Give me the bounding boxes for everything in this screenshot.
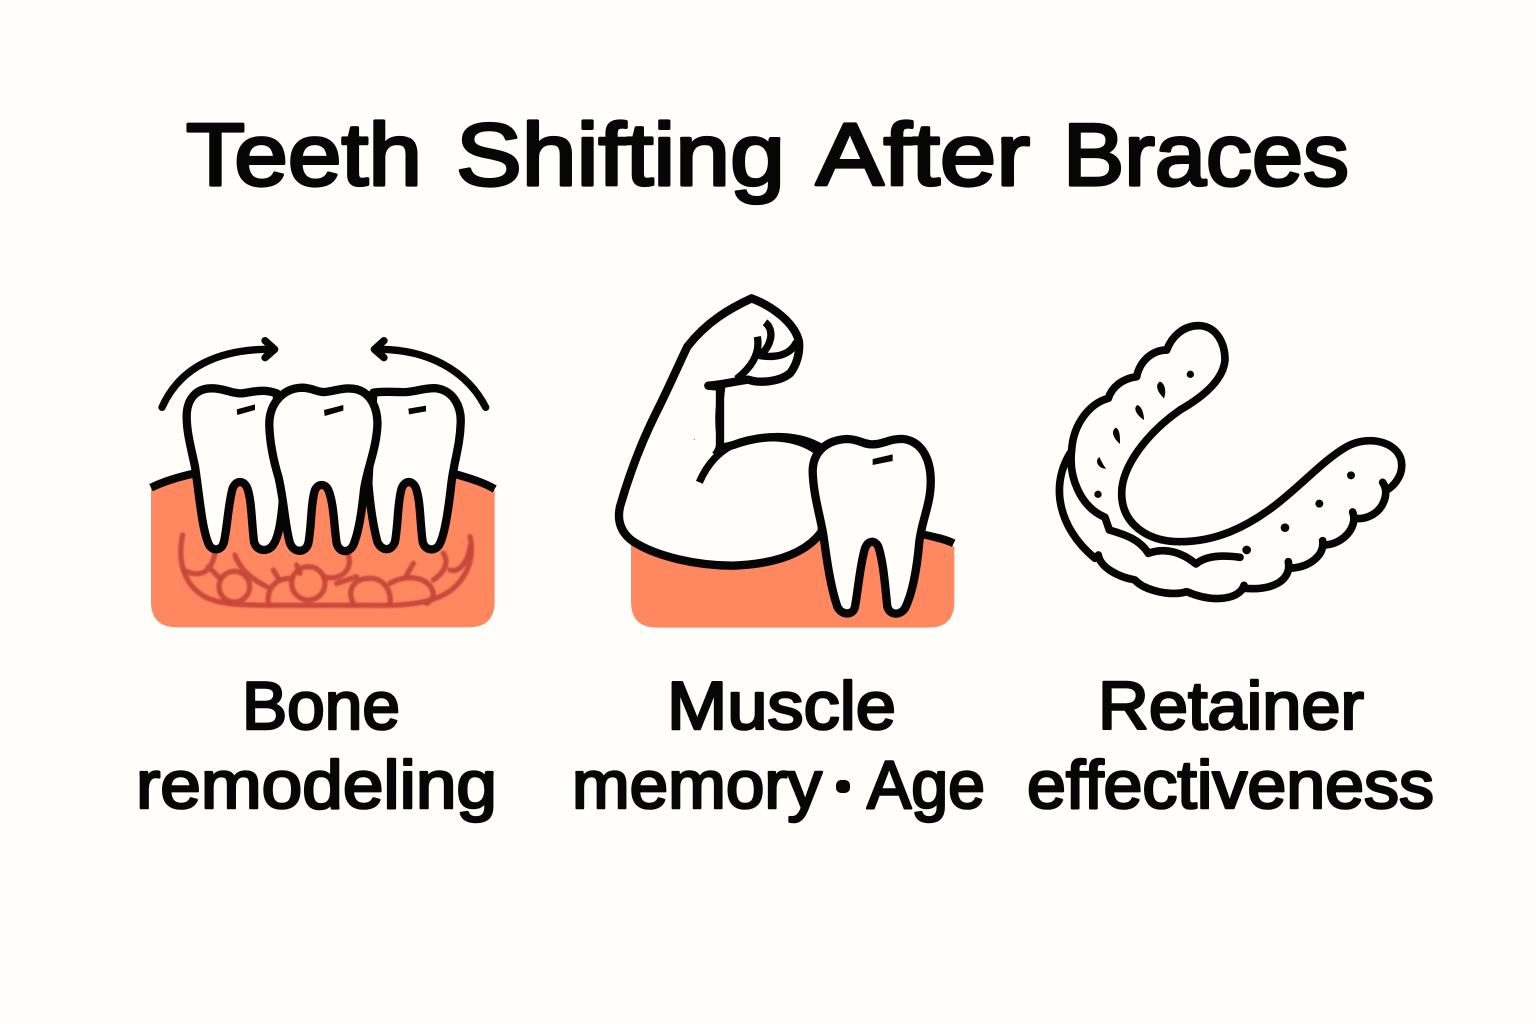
icon: bone remodeling with three teeth bbox=[151, 341, 495, 627]
biceps and finger lines bbox=[699, 322, 817, 482]
tooth highlight bbox=[873, 454, 893, 465]
label: muscle memory and age: Muscle bbox=[667, 668, 896, 744]
retainer back wall bbox=[1059, 453, 1095, 558]
gum block bbox=[151, 473, 495, 627]
arm outline bbox=[619, 298, 827, 566]
title: Braces bbox=[1063, 105, 1349, 204]
label: retainer effectiveness bbox=[1027, 668, 1434, 823]
retainer outline bbox=[1071, 326, 1402, 564]
tooth: right bbox=[368, 388, 461, 549]
retainer scalloped edge bbox=[1098, 482, 1386, 599]
tooth highlights bbox=[237, 404, 426, 416]
retainer attachment dots bbox=[1094, 371, 1355, 554]
label: muscle memory and age bbox=[572, 668, 985, 823]
label: retainer effectiveness: Retainer bbox=[1098, 668, 1364, 744]
gum block bbox=[631, 532, 954, 628]
title: Shifting bbox=[456, 105, 785, 204]
tooth: left bbox=[187, 388, 283, 550]
tooth bbox=[813, 439, 931, 614]
label: retainer effectiveness: effectiveness bbox=[1027, 747, 1434, 823]
title bbox=[186, 105, 1349, 204]
label: muscle memory and age: Age bbox=[867, 747, 985, 823]
arrow: left curved bbox=[162, 341, 275, 407]
arrow: right curved bbox=[374, 341, 486, 407]
title: Teeth bbox=[186, 105, 422, 204]
label: bone remodeling: Bone bbox=[242, 668, 400, 744]
speck bbox=[694, 439, 695, 440]
title: After bbox=[816, 105, 1030, 204]
label: bone remodeling: remodeling bbox=[136, 747, 497, 823]
label: muscle memory and age: memory bbox=[572, 747, 822, 823]
bone network bbox=[181, 535, 471, 605]
tooth: center bbox=[269, 388, 377, 551]
icon: flexed arm and tooth bbox=[619, 298, 954, 628]
label: bone remodeling bbox=[136, 668, 497, 823]
icon: clear retainer bbox=[1059, 326, 1402, 599]
